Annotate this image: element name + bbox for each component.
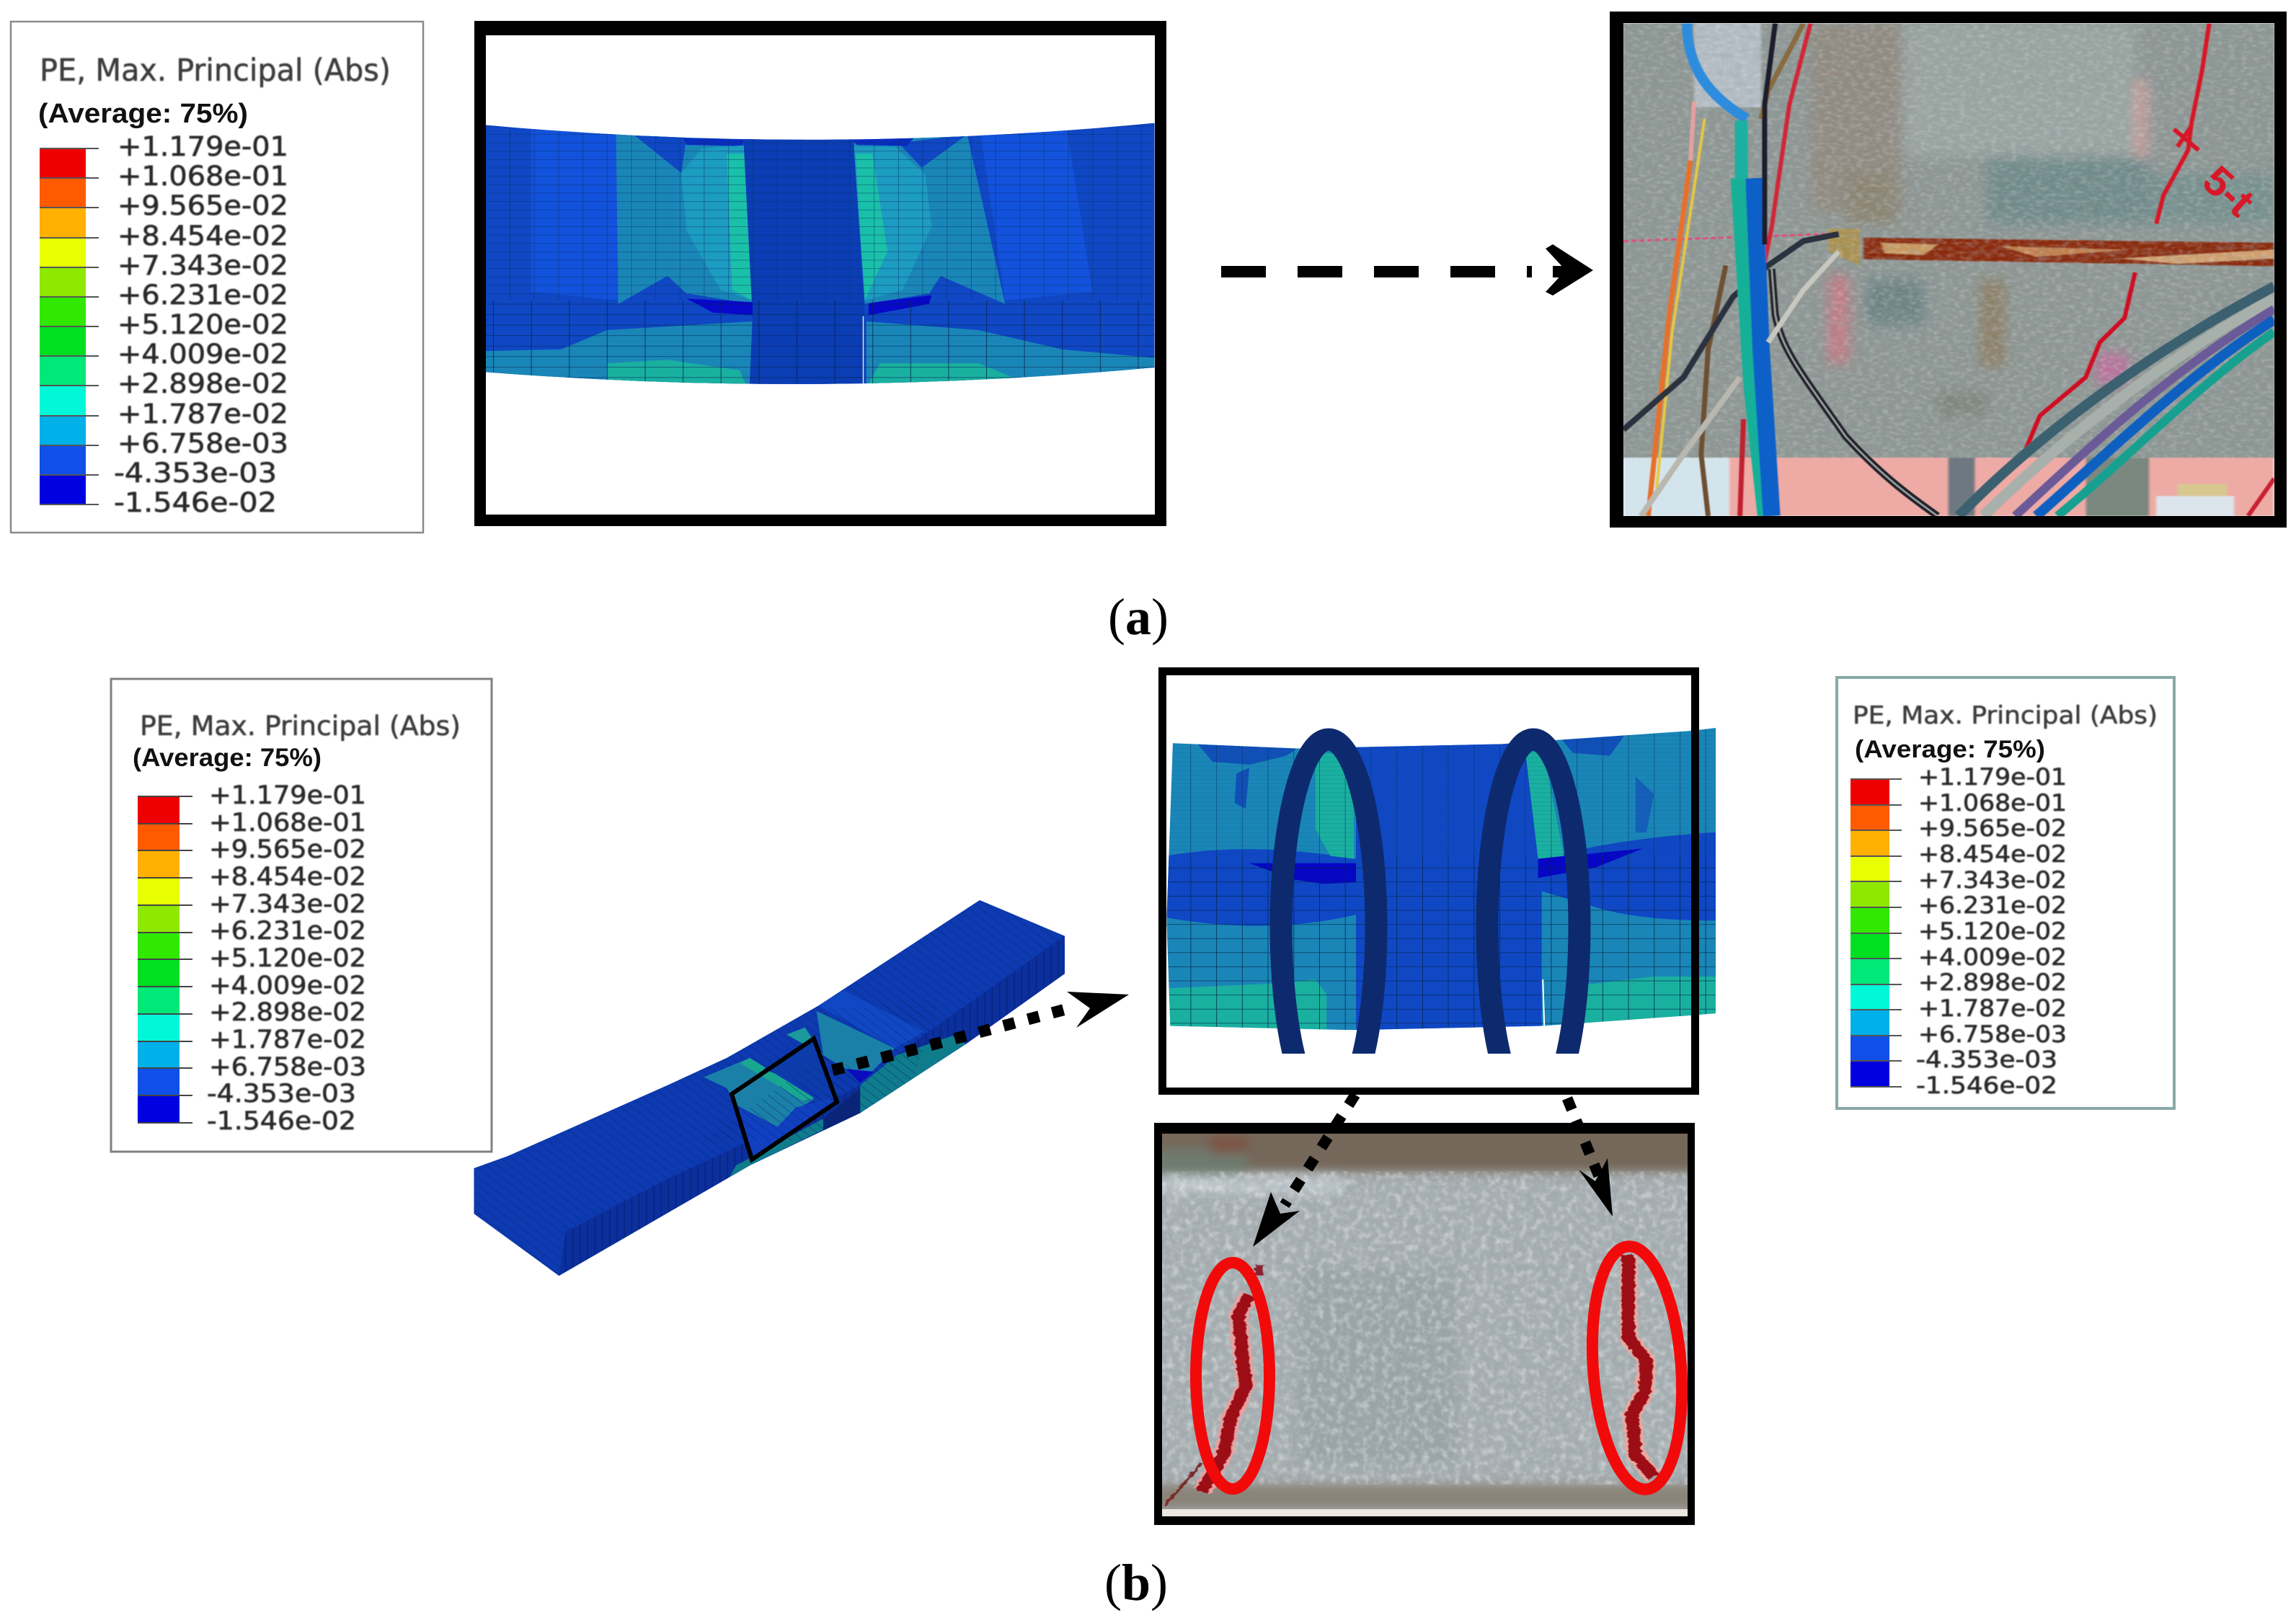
frame: [1158, 667, 1699, 1095]
legend values: -4.353e-03: [1916, 1046, 2057, 1073]
colour scale: [138, 796, 192, 1123]
caption (a): (a): [1108, 588, 1169, 646]
legend values: +1.068e-01: [209, 809, 366, 837]
highlight box on beam: [732, 1039, 837, 1160]
panel: (b) crack photo: [1153, 1123, 1701, 1525]
legend values: +1.787e-02: [118, 399, 288, 430]
legend title: PE, Max. Principal (Abs): [1853, 701, 2158, 730]
concrete photo: [1153, 1124, 1701, 1516]
legend values: +6.231e-02: [209, 917, 366, 946]
photo annotation: handwritten mark: 5-t: [2194, 156, 2263, 226]
crack left: [1165, 1265, 1259, 1506]
legend values: +1.787e-02: [1918, 995, 2067, 1022]
legend values: +6.758e-03: [1918, 1021, 2067, 1048]
legend values: -1.546e-02: [207, 1107, 356, 1136]
legend values: +6.758e-03: [209, 1053, 366, 1082]
legend values: +4.009e-02: [209, 971, 366, 1000]
legend title: PE, Max. Principal (Abs): [140, 711, 461, 742]
frame: [1610, 12, 2287, 528]
frame: [474, 21, 1166, 526]
legend values: [114, 131, 288, 518]
legend values: +7.343e-02: [209, 890, 366, 919]
legend values: +1.179e-01: [1918, 763, 2067, 791]
panel: (b) left legend: [111, 679, 492, 1152]
caption (b): (b): [1104, 1554, 1168, 1611]
legend values: +8.454e-02: [209, 863, 366, 891]
panel: (a) legend: [11, 22, 423, 533]
panel: (b) 3D beam model: [469, 898, 1067, 1279]
legend values: +5.120e-02: [209, 944, 366, 973]
colour scale: [1850, 779, 1902, 1087]
legend values: +5.120e-02: [1918, 917, 2067, 945]
legend values: +6.758e-03: [118, 428, 288, 459]
legend values: +9.565e-02: [118, 190, 288, 221]
legend values: +5.120e-02: [118, 309, 288, 340]
panel: (b) right legend: [1837, 677, 2174, 1108]
legend values: +7.343e-02: [1918, 866, 2067, 894]
legend title: PE, Max. Principal (Abs): [40, 53, 391, 89]
crack location rings: [1281, 739, 1579, 1114]
colour scale: [40, 148, 99, 504]
arrow: left ring to left crack: [1253, 1095, 1355, 1247]
legend values: +6.231e-02: [118, 280, 288, 311]
legend values: +7.343e-02: [118, 250, 288, 281]
legend values: -1.546e-02: [1916, 1072, 2057, 1099]
arrow: right ring to right crack: [1567, 1098, 1613, 1217]
red ellipse right: [1584, 1243, 1690, 1493]
legend subtitle: (Average: 75%): [133, 744, 322, 772]
legend values: +4.009e-02: [118, 339, 288, 370]
legend values: +1.179e-01: [118, 131, 288, 162]
crack right: [1628, 1255, 1654, 1477]
red ellipse left: [1196, 1263, 1269, 1489]
photo: strain gauge and cracks: [1623, 23, 2274, 516]
legend values: [207, 781, 366, 1136]
legend values: +6.231e-02: [1918, 891, 2067, 919]
legend subtitle: (Average: 75%): [38, 99, 248, 129]
legend values: -1.546e-02: [114, 487, 277, 518]
legend values: +9.565e-02: [209, 835, 366, 864]
legend values: +1.787e-02: [209, 1026, 366, 1054]
legend values: +2.898e-02: [118, 368, 288, 399]
deformed beam: [469, 898, 1067, 1279]
legend values: +8.454e-02: [1918, 840, 2067, 868]
legend values: +1.068e-01: [118, 161, 288, 192]
legend values: -4.353e-03: [207, 1080, 356, 1108]
legend values: -4.353e-03: [114, 458, 277, 489]
legend subtitle: (Average: 75%): [1855, 736, 2045, 763]
legend values: +8.454e-02: [118, 221, 288, 252]
panel: (a) experimental photo: [1610, 12, 2287, 528]
legend values: +1.179e-01: [209, 781, 366, 810]
zoomed FE contour: [1165, 726, 1716, 1032]
legend values: [1916, 763, 2067, 1099]
panel: (b) zoomed FE view: [1158, 667, 1716, 1114]
FE beam contour: [485, 119, 1157, 399]
frame: [1154, 1123, 1695, 1525]
legend values: +4.009e-02: [1918, 943, 2067, 971]
legend values: +1.068e-01: [1918, 789, 2067, 817]
arrow: beam to zoomed view: [833, 992, 1129, 1070]
legend values: +2.898e-02: [209, 998, 366, 1027]
legend values: +9.565e-02: [1918, 814, 2067, 842]
panel: (a) FE model close-up: [474, 21, 1166, 526]
arrow: model to photo (a): [1221, 244, 1593, 295]
legend values: +2.898e-02: [1918, 969, 2067, 996]
